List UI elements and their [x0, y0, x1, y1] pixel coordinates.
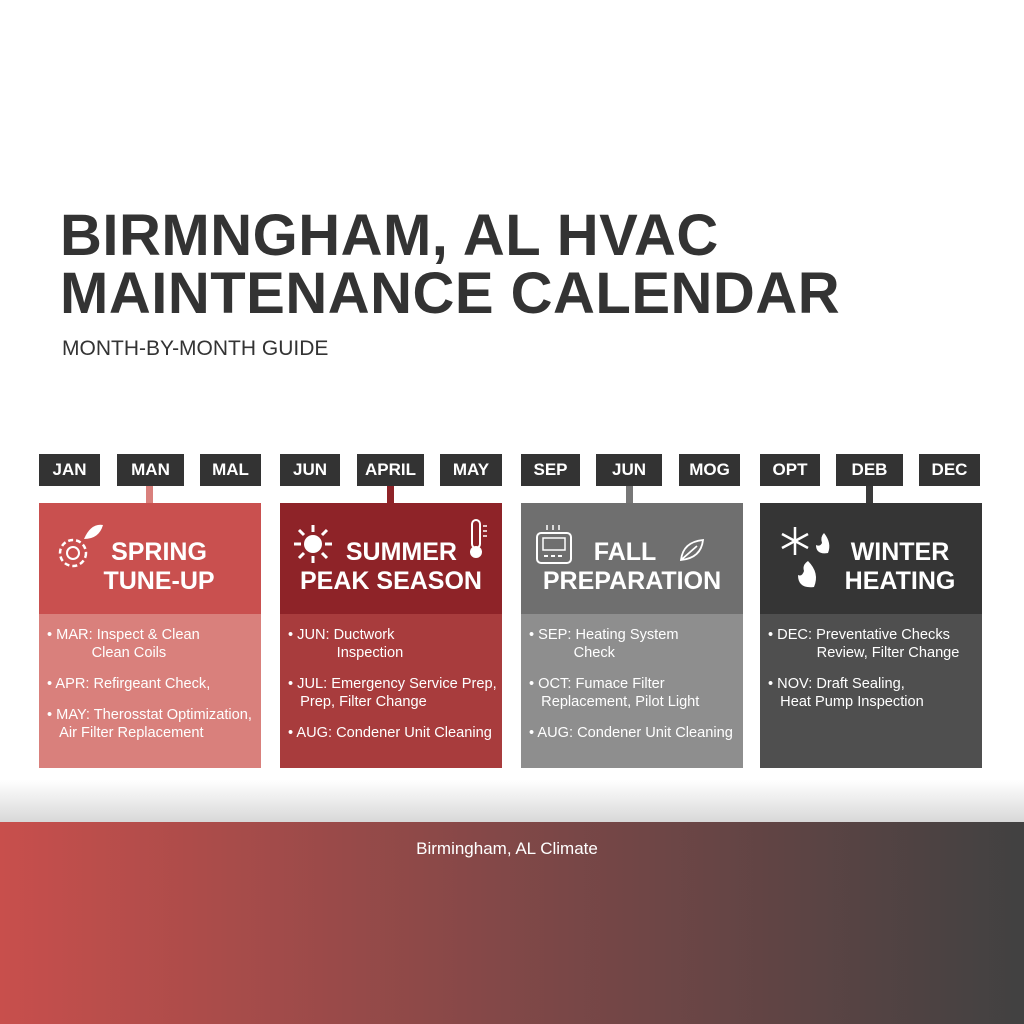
text: MAY: [453, 460, 489, 479]
text: JUN: [293, 460, 327, 479]
footer band: [0, 822, 1024, 1024]
icon: leaf: [680, 539, 704, 561]
panel: fall: PREPARATION: [543, 567, 721, 595]
title: [60, 203, 840, 326]
panel: winter: • DEC: Preventative Checks: [768, 627, 950, 643]
text: OPT: [773, 460, 807, 479]
panel: summer: SUMMER: [346, 538, 457, 566]
panel: summer: • AUG: Condener Unit Cleaning: [288, 725, 492, 741]
panel: fall: • OCT: Fumace Filter: [529, 676, 665, 692]
panel: spring: SPRING: [111, 538, 207, 566]
panel: fall: [521, 503, 743, 768]
text: SEP: [533, 460, 568, 479]
footer band: Birmingham, AL Climate: [416, 839, 598, 858]
panel: summer: Prep, Filter Change: [300, 694, 427, 710]
panel: fall: FALL: [594, 538, 656, 566]
title: MAINTENANCE CALENDAR: [60, 261, 840, 326]
text: MAN: [131, 460, 170, 479]
panel: spring: [39, 503, 261, 768]
icon: thermometer: [470, 519, 487, 558]
panel: fall: • AUG: Condener Unit Cleaning: [529, 725, 733, 741]
title: BIRMNGHAM, AL HVAC: [60, 203, 719, 268]
text: MAL: [212, 460, 249, 479]
panel: winter: [760, 503, 982, 768]
panel: summer: Inspection: [337, 645, 403, 661]
subtitle: MONTH-BY-MONTH GUIDE: [62, 337, 328, 360]
panel: spring: • APR: Refirgeant Check,: [47, 676, 210, 692]
text: DEC: [932, 460, 967, 479]
icon: gear leaf: [58, 524, 103, 568]
panel: winter: Heat Pump Inspection: [780, 694, 924, 710]
panel: summer: • JUN: Ductwork: [288, 627, 394, 643]
text: DEB: [852, 460, 887, 479]
panel: spring: Clean Coils: [92, 645, 166, 661]
panel: winter: WINTER: [851, 538, 949, 566]
text: APRIL: [365, 460, 416, 479]
text: JAN: [52, 460, 86, 479]
panel: summer: • JUL: Emergency Service Prep,: [288, 676, 497, 692]
panel: spring: • MAR: Inspect & Clean: [47, 627, 200, 643]
panel: spring: TUNE-UP: [103, 567, 215, 595]
icon: snowflake and flames: [782, 527, 830, 588]
icon: sun: [294, 525, 332, 563]
panel: spring: Air Filter Replacement: [59, 725, 204, 741]
panel: winter: • NOV: Draft Sealing,: [768, 676, 905, 692]
panel: spring: • MAY: Therosstat Optimization,: [47, 707, 252, 723]
text: MOG: [689, 460, 730, 479]
panel: fall: Replacement, Pilot Light: [541, 694, 699, 710]
panel: summer: PEAK SEASON: [300, 567, 482, 595]
panel: winter: Review, Filter Change: [817, 645, 959, 661]
month tags: [39, 454, 980, 503]
panel: fall: • SEP: Heating System: [529, 627, 678, 643]
panel: summer: [280, 503, 502, 768]
panel: fall: Check: [574, 645, 615, 661]
icon: furnace: [536, 525, 572, 564]
text: JUN: [612, 460, 646, 479]
panel: winter: HEATING: [845, 567, 955, 595]
